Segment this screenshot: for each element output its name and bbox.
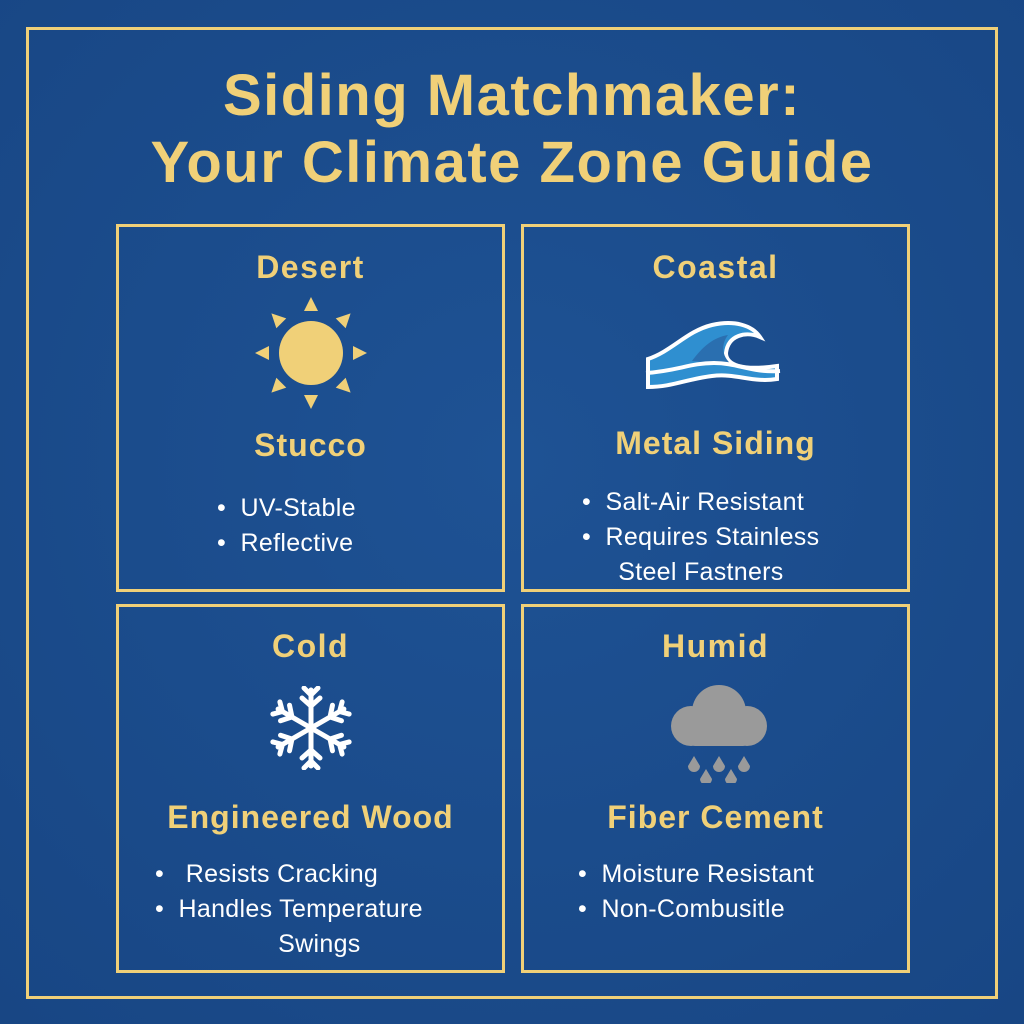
material: engineered wood: Engineered Wood [167,799,454,835]
title: Your Climate Zone Guide [150,130,874,195]
bullets: coastal: Steel Fastners [618,558,784,586]
panel: coastal [521,224,910,592]
material: fiber cement: Fiber Cement [607,799,824,835]
bullets: coastal: • Requires Stainless [582,523,819,551]
bullets: cold: Swings [278,930,361,958]
title: Siding Matchmaker: [223,63,801,128]
bullets: desert [217,494,356,557]
title [150,63,874,195]
bullets: cold: • Handles Temperature [155,895,423,923]
bullets: cold: • Resists Cracking [155,860,378,888]
icon: wave [646,321,780,389]
bullets: desert: • UV-Stable [217,494,356,522]
icon: rain cloud [671,685,767,783]
icon: snowflake [270,686,352,770]
bullets: coastal: • Salt-Air Resistant [582,488,804,516]
bullets: cold [155,860,423,958]
bullets: humid: • Non-Combusitle [578,895,785,923]
material: metal siding: Metal Siding [615,425,816,461]
bullets: humid: • Moisture Resistant [578,860,814,888]
heading: cold: Cold [272,628,349,664]
panel: desert [116,224,505,592]
heading: desert: Desert [256,249,365,285]
heading: humid: Humid [662,628,769,664]
material: stucco: Stucco [254,427,367,463]
bullets: humid [578,860,814,923]
icon: sun [255,297,367,409]
heading: coastal: Coastal [652,249,779,285]
bullets: coastal [582,488,819,586]
panel: humid [521,604,910,973]
panel: cold [116,604,505,973]
bullets: desert: • Reflective [217,529,353,557]
